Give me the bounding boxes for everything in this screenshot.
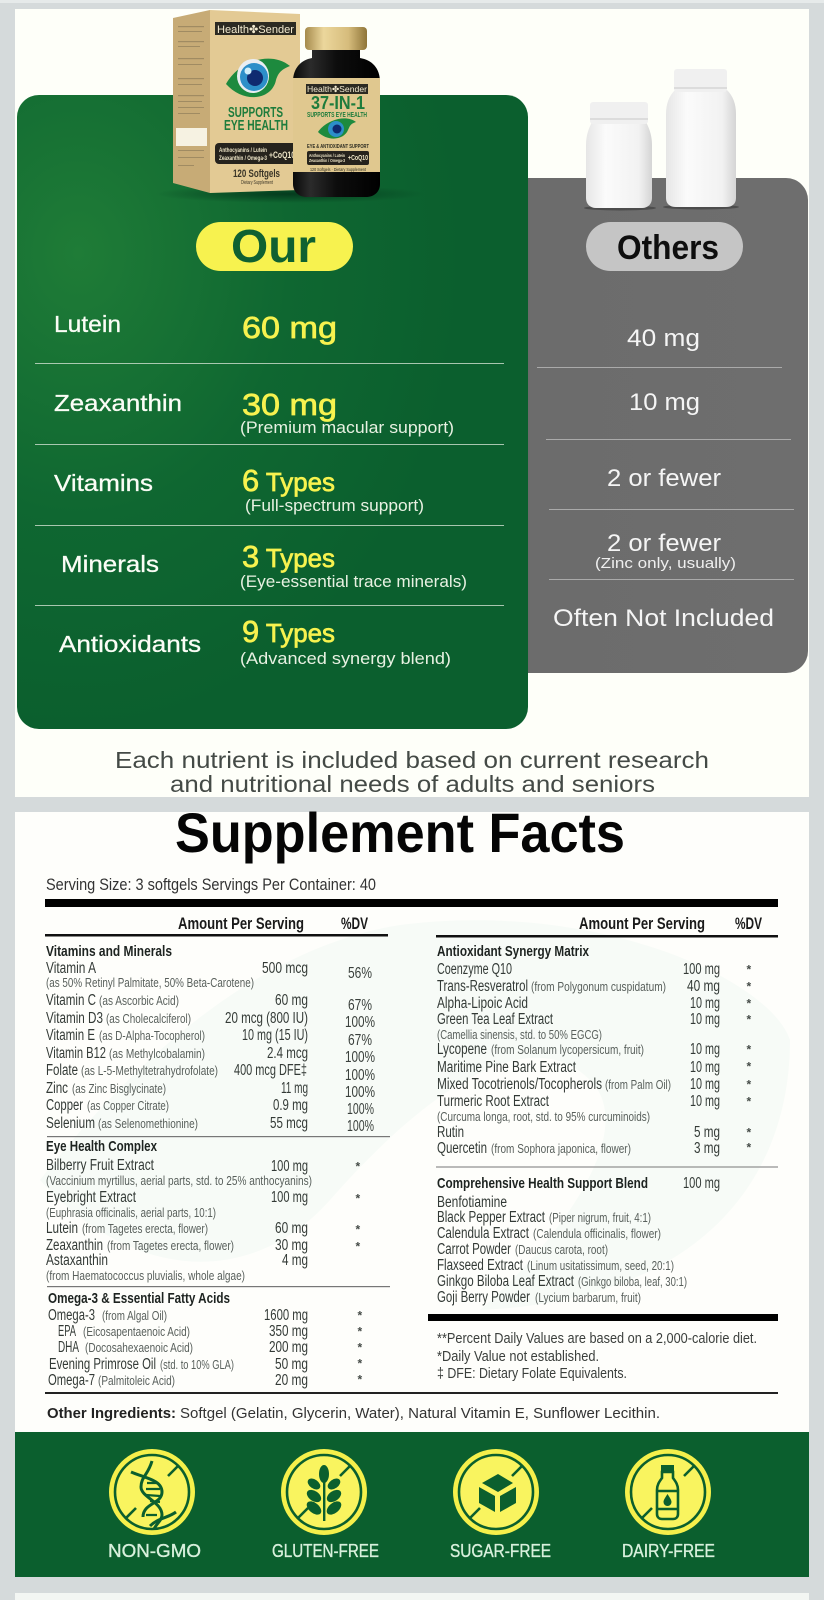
section: omega-3 and essential fatty acids: Omega-7 bbox=[48, 1372, 95, 1389]
row: Lutein: Lutein bbox=[54, 311, 121, 337]
section: vitamins and minerals: 100% bbox=[345, 1084, 375, 1101]
section: antioxidant synergy matrix: 10 mg bbox=[690, 995, 720, 1012]
product image: box and bottle: EYE HEALTH bbox=[224, 117, 288, 134]
footnotes bbox=[437, 1331, 757, 1382]
section: antioxidant synergy matrix: 10 mg bbox=[690, 1041, 720, 1058]
product image: box and bottle: SUPPORTS bbox=[228, 104, 283, 121]
section: vitamins and minerals: 67% bbox=[348, 1032, 372, 1049]
next panel edge bbox=[15, 1593, 809, 1600]
section: omega-3 and essential fatty acids: 1600 mg bbox=[264, 1307, 308, 1324]
others value: minerals: (Zinc only, usually) bbox=[595, 555, 736, 572]
table header: left: %DV bbox=[341, 915, 368, 933]
row: Lutein: 60 mg bbox=[242, 310, 337, 345]
section: comprehensive health support blend: Black Pepper Extract bbox=[437, 1209, 546, 1226]
section: antioxidant synergy matrix: * bbox=[746, 1078, 752, 1092]
section: vitamins and minerals: Folate bbox=[46, 1062, 78, 1079]
section: omega-3 and essential fatty acids: Omega-3 bbox=[48, 1307, 95, 1324]
icon: gluten-free bbox=[281, 1449, 367, 1535]
product image: box and bottle: 120 Softgels · Dietary Supplement bbox=[310, 167, 367, 172]
section: vitamins and minerals: 100% bbox=[345, 1014, 375, 1031]
section: vitamins and minerals: (as Methylcobalamin) bbox=[109, 1047, 205, 1061]
section: eye health complex: (Euphrasia officinalis, aerial parts, 10:1) bbox=[46, 1206, 216, 1220]
product image: box and bottle: Dietary Supplement bbox=[241, 180, 273, 186]
section: omega-3 and essential fatty acids: Evening Primrose Oil bbox=[49, 1356, 156, 1373]
section: antioxidant synergy matrix: (from Palm Oil) bbox=[605, 1078, 671, 1092]
section: omega-3 and essential fatty acids: * bbox=[358, 1356, 362, 1370]
other ingredients: Other Ingredients: bbox=[47, 1406, 176, 1422]
product image: box and bottle: 120 Softgels bbox=[233, 168, 280, 180]
section: antioxidant synergy matrix: Coenzyme Q10 bbox=[437, 961, 512, 978]
section: antioxidant synergy matrix: 3 mg bbox=[694, 1140, 720, 1157]
heading: Supplement Facts bbox=[175, 801, 625, 864]
section: omega-3 and essential fatty acids: EPA bbox=[58, 1323, 76, 1340]
section: omega-3 and essential fatty acids: * bbox=[358, 1324, 362, 1338]
section: antioxidant synergy matrix: (from Sophora japonica, flower) bbox=[491, 1142, 631, 1156]
row: Antioxidants: 9 Types bbox=[242, 614, 335, 649]
section: comprehensive health support blend: 100 mg bbox=[683, 1175, 720, 1192]
product image: box and bottle: +CoQ10 bbox=[269, 150, 295, 160]
section: antioxidant synergy matrix: Alpha-Lipoic Acid bbox=[437, 995, 528, 1012]
section: vitamins and minerals: (as Ascorbic Acid) bbox=[99, 994, 179, 1008]
icon: sugar-free bbox=[453, 1449, 539, 1535]
others value: minerals bbox=[595, 530, 736, 572]
section: omega-3 and essential fatty acids: * bbox=[358, 1340, 362, 1354]
caption: Each nutrient is included based on current research bbox=[115, 747, 709, 773]
section: vitamins and minerals: 100% bbox=[347, 1101, 374, 1118]
section: eye health complex: Astaxanthin bbox=[46, 1252, 108, 1269]
section: vitamins and minerals: Vitamin A bbox=[46, 960, 97, 977]
product image: box and bottle: EYE & ANTIOXIDANT SUPPORT bbox=[307, 144, 369, 150]
section: eye health complex: Eyebright Extract bbox=[46, 1189, 137, 1206]
section: omega-3 and essential fatty acids: (from Algal Oil) bbox=[102, 1309, 167, 1323]
section: vitamins and minerals: 67% bbox=[348, 997, 372, 1014]
badge: Our: Our bbox=[231, 220, 316, 272]
section: vitamins and minerals: 11 mg bbox=[281, 1080, 308, 1097]
section: omega-3 and essential fatty acids: (Palmitoleic Acid) bbox=[98, 1374, 175, 1388]
section: omega-3 and essential fatty acids: (Docosahexaenoic Acid) bbox=[85, 1341, 193, 1355]
section: eye health complex: 60 mg bbox=[275, 1220, 308, 1237]
product image: box and bottle: Zeaxanthin / Omega-3 bbox=[219, 155, 267, 162]
others value: zeaxanthin: 10 mg bbox=[629, 389, 700, 416]
section: vitamins and minerals: (as Zinc Bisglycinate) bbox=[72, 1082, 166, 1096]
section: vitamins and minerals: (as D-Alpha-Tocopherol) bbox=[99, 1029, 205, 1043]
label: gluten-free: GLUTEN-FREE bbox=[272, 1541, 379, 1561]
label: non-GMO: NON-GMO bbox=[108, 1541, 201, 1561]
section: vitamins and minerals: Vitamins and Minerals bbox=[46, 943, 172, 960]
section: omega-3 and essential fatty acids: 20 mg bbox=[275, 1372, 308, 1389]
section: antioxidant synergy matrix: Turmeric Root Extract bbox=[437, 1093, 550, 1110]
section: vitamins and minerals: Zinc bbox=[46, 1080, 68, 1097]
section: antioxidant synergy matrix: (Camellia sinensis, std. to 50% EGCG) bbox=[437, 1028, 602, 1042]
section: comprehensive health support blend: Ginkgo Biloba Leaf Extract bbox=[437, 1273, 575, 1290]
section: comprehensive health support blend: (Piper nigrum, fruit, 4:1) bbox=[549, 1211, 651, 1225]
section: antioxidant synergy matrix: * bbox=[746, 980, 752, 994]
section: antioxidant synergy matrix: * bbox=[746, 1094, 752, 1108]
section: antioxidant synergy matrix: 40 mg bbox=[687, 978, 720, 995]
caption: and nutritional needs of adults and seniors bbox=[170, 771, 655, 797]
section: antioxidant synergy matrix: * bbox=[746, 1042, 752, 1056]
row: Vitamins: Vitamins bbox=[54, 470, 153, 496]
section: eye health complex: * bbox=[356, 1240, 360, 1254]
row: Minerals bbox=[61, 539, 467, 591]
section: comprehensive health support blend: (Linum usitatissimum, seed, 20:1) bbox=[527, 1259, 674, 1273]
others value: minerals: 2 or fewer bbox=[607, 530, 721, 557]
product image: box and bottle bbox=[155, 10, 425, 203]
section: antioxidant synergy matrix: Lycopene bbox=[437, 1041, 487, 1058]
section: antioxidant synergy matrix: Quercetin bbox=[437, 1140, 487, 1157]
section: omega-3 and essential fatty acids bbox=[48, 1290, 362, 1389]
icon: dairy-free bbox=[625, 1449, 711, 1535]
section: omega-3 and essential fatty acids: * bbox=[358, 1372, 362, 1386]
section: vitamins and minerals: (as L-5-Methyltetrahydrofolate) bbox=[81, 1064, 218, 1078]
others value: antioxidants: Often Not Included bbox=[553, 605, 774, 632]
section: eye health complex: 4 mg bbox=[282, 1252, 308, 1269]
section: antioxidant synergy matrix: * bbox=[746, 1012, 752, 1026]
footnotes: **Percent Daily Values are based on a 2,000-calorie diet. bbox=[437, 1331, 757, 1347]
section: comprehensive health support blend: Goji Berry Powder bbox=[437, 1289, 530, 1306]
section: vitamins and minerals: (as Copper Citrate) bbox=[87, 1099, 169, 1113]
row: Vitamins: 6 Types bbox=[242, 463, 335, 498]
section: eye health complex: * bbox=[356, 1222, 360, 1236]
product image: box and bottle: Health✤Sender bbox=[217, 24, 294, 36]
table header: right: %DV bbox=[735, 915, 762, 933]
label: sugar-free: SUGAR-FREE bbox=[450, 1541, 551, 1561]
section: vitamins and minerals: Vitamin B12 bbox=[46, 1045, 106, 1062]
icon: non-GMO bbox=[109, 1449, 195, 1535]
table header: right bbox=[436, 915, 778, 938]
product image: generic white bottles bbox=[584, 69, 739, 210]
panel: comparison bbox=[15, 9, 809, 797]
section: eye health complex: * bbox=[356, 1192, 360, 1206]
footnotes: ‡ DFE: Dietary Folate Equivalents. bbox=[437, 1366, 627, 1382]
section: antioxidant synergy matrix: (Curcuma longa, root, std. to 95% curcuminoids) bbox=[437, 1110, 650, 1124]
panel: our background bbox=[17, 95, 528, 729]
section: comprehensive health support blend: Calendula Extract bbox=[437, 1225, 530, 1242]
section: eye health complex: 30 mg bbox=[275, 1237, 308, 1254]
section: vitamins and minerals: 60 mg bbox=[275, 992, 308, 1009]
section: antioxidant synergy matrix: (from Polygonum cuspidatum) bbox=[531, 980, 666, 994]
row: Zeaxanthin: Zeaxanthin bbox=[54, 390, 182, 416]
section: antioxidant synergy matrix: * bbox=[746, 962, 752, 976]
row: Minerals: (Eye-essential trace minerals) bbox=[240, 572, 467, 591]
section: vitamins and minerals: (as Selenomethionine) bbox=[98, 1117, 198, 1131]
section: vitamins and minerals: 56% bbox=[348, 965, 372, 982]
row: Antioxidants: (Advanced synergy blend) bbox=[240, 649, 451, 668]
section: antioxidant synergy matrix: Trans-Resveratrol bbox=[437, 978, 528, 995]
section: comprehensive health support blend: Benfotiamine bbox=[437, 1194, 507, 1211]
section: antioxidant synergy matrix: 10 mg bbox=[690, 1093, 720, 1110]
section: omega-3 and essential fatty acids: Omega-3 & Essential Fatty Acids bbox=[48, 1290, 230, 1307]
section: omega-3 and essential fatty acids: * bbox=[358, 1308, 362, 1322]
section: vitamins and minerals: 10 mg (15 IU) bbox=[242, 1027, 308, 1044]
table header: right: Amount Per Serving bbox=[579, 915, 705, 933]
section: vitamins and minerals: Vitamin C bbox=[46, 992, 96, 1009]
section: comprehensive health support blend: (Lycium barbarum, fruit) bbox=[535, 1291, 641, 1305]
row: Zeaxanthin: 30 mg bbox=[242, 387, 337, 422]
section: antioxidant synergy matrix: 10 mg bbox=[690, 1076, 720, 1093]
row: Vitamins: (Full-spectrum support) bbox=[245, 496, 424, 515]
footnotes: *Daily Value not established. bbox=[437, 1349, 599, 1365]
badge: Our bbox=[196, 220, 353, 272]
section: vitamins and minerals: 20 mcg (800 IU) bbox=[225, 1010, 308, 1027]
product image: box and bottle: Anthocyanins / Lutein bbox=[309, 153, 345, 158]
product image: box and bottle: Health✤Sender bbox=[307, 84, 367, 94]
section: vitamins and minerals: 100% bbox=[347, 1118, 374, 1135]
section: antioxidant synergy matrix: Maritime Pine Bark Extract bbox=[437, 1059, 577, 1076]
section: antioxidant synergy matrix: * bbox=[746, 1060, 752, 1074]
section: vitamins and minerals: 2.4 mcg bbox=[267, 1045, 308, 1062]
section: eye health complex: (Vaccinium myrtillus, aerial parts, std. to 25% anthocyanins) bbox=[46, 1174, 312, 1188]
row: Lutein bbox=[54, 310, 337, 345]
panel: free-from badges bbox=[15, 1432, 809, 1577]
section: antioxidant synergy matrix bbox=[437, 943, 752, 1157]
row: Zeaxanthin bbox=[54, 387, 454, 437]
section: omega-3 and essential fatty acids: (std. to 10% GLA) bbox=[160, 1358, 234, 1372]
panel: others background bbox=[500, 178, 808, 673]
section: comprehensive health support blend: (Calendula officinalis, flower) bbox=[533, 1227, 661, 1241]
section: eye health complex: * bbox=[356, 1160, 360, 1174]
others value: vitamins: 2 or fewer bbox=[607, 465, 721, 492]
label: dairy-free: DAIRY-FREE bbox=[622, 1541, 715, 1561]
serving info: Serving Size: 3 softgels Servings Per Container: 40 bbox=[46, 875, 376, 894]
section: omega-3 and essential fatty acids: 50 mg bbox=[275, 1356, 308, 1373]
section: vitamins and minerals: Vitamin D3 bbox=[46, 1010, 103, 1027]
section: eye health complex: Bilberry Fruit Extract bbox=[46, 1157, 155, 1174]
section: comprehensive health support blend: (Daucus carota, root) bbox=[515, 1243, 608, 1257]
section: antioxidant synergy matrix: * bbox=[746, 996, 752, 1010]
row: Zeaxanthin: (Premium macular support) bbox=[240, 418, 454, 437]
row: Minerals: Minerals bbox=[61, 551, 159, 577]
section: antioxidant synergy matrix: * bbox=[746, 1140, 752, 1154]
section: comprehensive health support blend bbox=[437, 1175, 720, 1306]
section: vitamins and minerals: Vitamin E bbox=[46, 1027, 95, 1044]
section: eye health complex: Eye Health Complex bbox=[46, 1138, 158, 1155]
section: antioxidant synergy matrix: 10 mg bbox=[690, 1059, 720, 1076]
product image: box and bottle: Anthocyanins / Lutein bbox=[219, 147, 267, 154]
caption bbox=[115, 747, 709, 797]
section: antioxidant synergy matrix: Rutin bbox=[437, 1124, 464, 1141]
section: vitamins and minerals: Copper bbox=[46, 1097, 83, 1114]
section: vitamins and minerals: Selenium bbox=[46, 1115, 95, 1132]
section: vitamins and minerals: 0.9 mg bbox=[273, 1097, 308, 1114]
section: eye health complex: (from Tagetes erecta, flower) bbox=[82, 1222, 208, 1236]
table header: left bbox=[45, 915, 388, 936]
other ingredients: Softgel (Gelatin, Glycerin, Water), Natural Vitamin E, Sunflower Lecithin. bbox=[180, 1406, 660, 1422]
row: Antioxidants: Antioxidants bbox=[59, 631, 201, 657]
row: Minerals: 3 Types bbox=[242, 539, 335, 574]
panel: supplement facts bbox=[15, 801, 809, 1432]
section: antioxidant synergy matrix: Antioxidant Synergy Matrix bbox=[437, 943, 590, 960]
section: antioxidant synergy matrix: Mixed Tocotrienols/Tocopherols bbox=[437, 1076, 602, 1093]
product image: box and bottle: SUPPORTS EYE HEALTH bbox=[307, 112, 367, 119]
others value: lutein: 40 mg bbox=[627, 325, 700, 352]
section: vitamins and minerals: 500 mcg bbox=[262, 960, 308, 977]
row: Antioxidants bbox=[59, 614, 451, 668]
section: antioxidant synergy matrix: (from Solanum lycopersicum, fruit) bbox=[491, 1043, 644, 1057]
section: antioxidant synergy matrix: * bbox=[746, 1126, 752, 1140]
section: eye health complex: 100 mg bbox=[271, 1189, 308, 1206]
section: vitamins and minerals: 55 mcg bbox=[270, 1115, 308, 1132]
section: vitamins and minerals: 400 mcg DFE‡ bbox=[234, 1062, 307, 1079]
section: eye health complex: 100 mg bbox=[271, 1158, 308, 1175]
section: eye health complex bbox=[46, 1138, 360, 1283]
section: vitamins and minerals: (as Cholecalciferol) bbox=[106, 1012, 191, 1026]
table header: left: Amount Per Serving bbox=[178, 915, 304, 933]
badge: Others: Others bbox=[617, 229, 719, 267]
section: omega-3 and essential fatty acids: 200 mg bbox=[269, 1339, 308, 1356]
section: comprehensive health support blend: Carrot Powder bbox=[437, 1241, 511, 1258]
section: comprehensive health support blend: (Ginkgo biloba, leaf, 30:1) bbox=[578, 1275, 687, 1289]
section: antioxidant synergy matrix: 5 mg bbox=[694, 1124, 720, 1141]
row: Vitamins bbox=[54, 463, 424, 515]
section: vitamins and minerals: (as 50% Retinyl Palmitate, 50% Beta-Carotene) bbox=[46, 976, 254, 990]
section: eye health complex: Zeaxanthin bbox=[46, 1237, 103, 1254]
section: antioxidant synergy matrix: Green Tea Leaf Extract bbox=[437, 1011, 553, 1028]
section: omega-3 and essential fatty acids: DHA bbox=[58, 1339, 79, 1356]
section: eye health complex: Lutein bbox=[46, 1220, 78, 1237]
section: eye health complex: (from Tagetes erecta, flower) bbox=[107, 1239, 234, 1253]
product image: box and bottle: Zeaxanthin / Omega-3 bbox=[309, 158, 345, 163]
section: comprehensive health support blend: Comprehensive Health Support Blend bbox=[437, 1175, 648, 1192]
section: antioxidant synergy matrix: 10 mg bbox=[690, 1011, 720, 1028]
badge: Others bbox=[586, 222, 743, 271]
section: eye health complex: (from Haematococcus pluvialis, whole algae) bbox=[46, 1269, 245, 1283]
section: omega-3 and essential fatty acids: (Eicosapentaenoic Acid) bbox=[83, 1325, 190, 1339]
section: vitamins and minerals: 100% bbox=[345, 1049, 375, 1066]
product image: box and bottle: 37-IN-1 bbox=[311, 93, 365, 113]
section: omega-3 and essential fatty acids: 350 mg bbox=[269, 1323, 308, 1340]
product image: box and bottle: +CoQ10 bbox=[348, 155, 368, 162]
section: vitamins and minerals bbox=[46, 943, 375, 1135]
section: comprehensive health support blend: Flaxseed Extract bbox=[437, 1257, 524, 1274]
section: vitamins and minerals: 100% bbox=[345, 1067, 375, 1084]
section: antioxidant synergy matrix: 100 mg bbox=[683, 961, 720, 978]
